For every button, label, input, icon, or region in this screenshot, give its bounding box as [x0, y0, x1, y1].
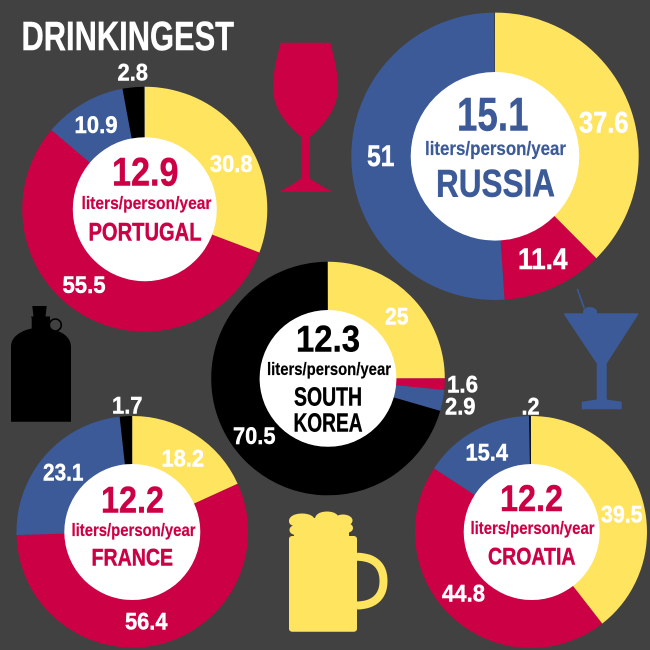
value labels: France: 1.7 [112, 393, 142, 420]
value labels: Russia: 11.4 [518, 243, 568, 276]
value labels: Russia: 37.6 [579, 107, 628, 140]
country: Russia: RUSSIA [436, 163, 555, 206]
total: Russia: 15.1 [457, 88, 528, 141]
total: France: 12.2 [101, 480, 164, 521]
country: South Korea: KOREA [294, 410, 362, 438]
value labels: Portugal: 10.9 [74, 112, 118, 139]
unit: Croatia: liters/person/year [470, 518, 595, 538]
total: South Korea: 12.3 [296, 318, 360, 360]
donut panel: Croatia [442, 393, 642, 607]
value labels: South Korea: 70.5 [233, 423, 276, 450]
total: Portugal: 12.9 [112, 150, 178, 194]
value labels: South Korea [233, 303, 478, 450]
value labels: France [43, 393, 204, 635]
value labels: Croatia: 15.4 [466, 439, 509, 466]
value labels: Portugal: 2.8 [118, 60, 148, 87]
donut panel: France [43, 393, 204, 635]
value labels: France: 56.4 [125, 608, 168, 635]
donut chart: France [74, 474, 190, 590]
unit: Russia: liters/person/year [425, 138, 566, 160]
unit: France: liters/person/year [72, 520, 196, 540]
value labels: Croatia [442, 393, 642, 607]
donut chart: Portugal [84, 148, 206, 270]
value labels: South Korea: 25 [385, 303, 408, 330]
donut panel: Russia [367, 72, 628, 276]
icon: beer mug [289, 512, 384, 632]
country: France: FRANCE [92, 545, 173, 572]
centre disc: Portugal [73, 137, 217, 281]
centre disc: France [64, 464, 200, 600]
country: South Korea [294, 383, 362, 438]
unit: Portugal: liters/person/year [82, 193, 212, 213]
donut chart: Russia [423, 84, 567, 228]
centre disc: South Korea [260, 310, 396, 447]
value labels: Portugal: 30.8 [210, 151, 252, 178]
value labels: France: 23.1 [43, 460, 84, 487]
centre disc: Russia [411, 72, 579, 241]
value labels: Croatia: 39.5 [601, 501, 642, 528]
value labels: France: 18.2 [162, 446, 204, 473]
total: Croatia: 12.2 [500, 478, 563, 519]
donut chart: Croatia [473, 474, 589, 590]
donut panel: Portugal [62, 60, 252, 299]
value labels: Russia [367, 107, 628, 276]
value labels: South Korea: 2.9 [445, 393, 476, 420]
country: Croatia: CROATIA [488, 543, 576, 570]
title: DRINKINGEST [22, 13, 234, 59]
value labels: Croatia: 44.8 [442, 580, 485, 607]
value labels: Portugal: 55.5 [62, 272, 106, 299]
value labels: South Korea: 1.6 [447, 372, 478, 399]
country: South Korea: SOUTH [294, 383, 362, 411]
value labels: Portugal [62, 60, 252, 299]
icon: wine glass [273, 43, 338, 192]
icon: jug [11, 306, 71, 422]
donut chart: South Korea [270, 320, 386, 437]
donut panel: South Korea [233, 303, 478, 450]
unit: South Korea: liters/person/year [267, 359, 391, 379]
value labels: Russia: 51 [367, 140, 394, 173]
centre disc: Croatia [464, 464, 600, 600]
country: Portugal: PORTUGAL [88, 219, 202, 247]
icon: cocktail glass [564, 289, 638, 409]
value labels: Croatia: .2 [522, 393, 540, 420]
